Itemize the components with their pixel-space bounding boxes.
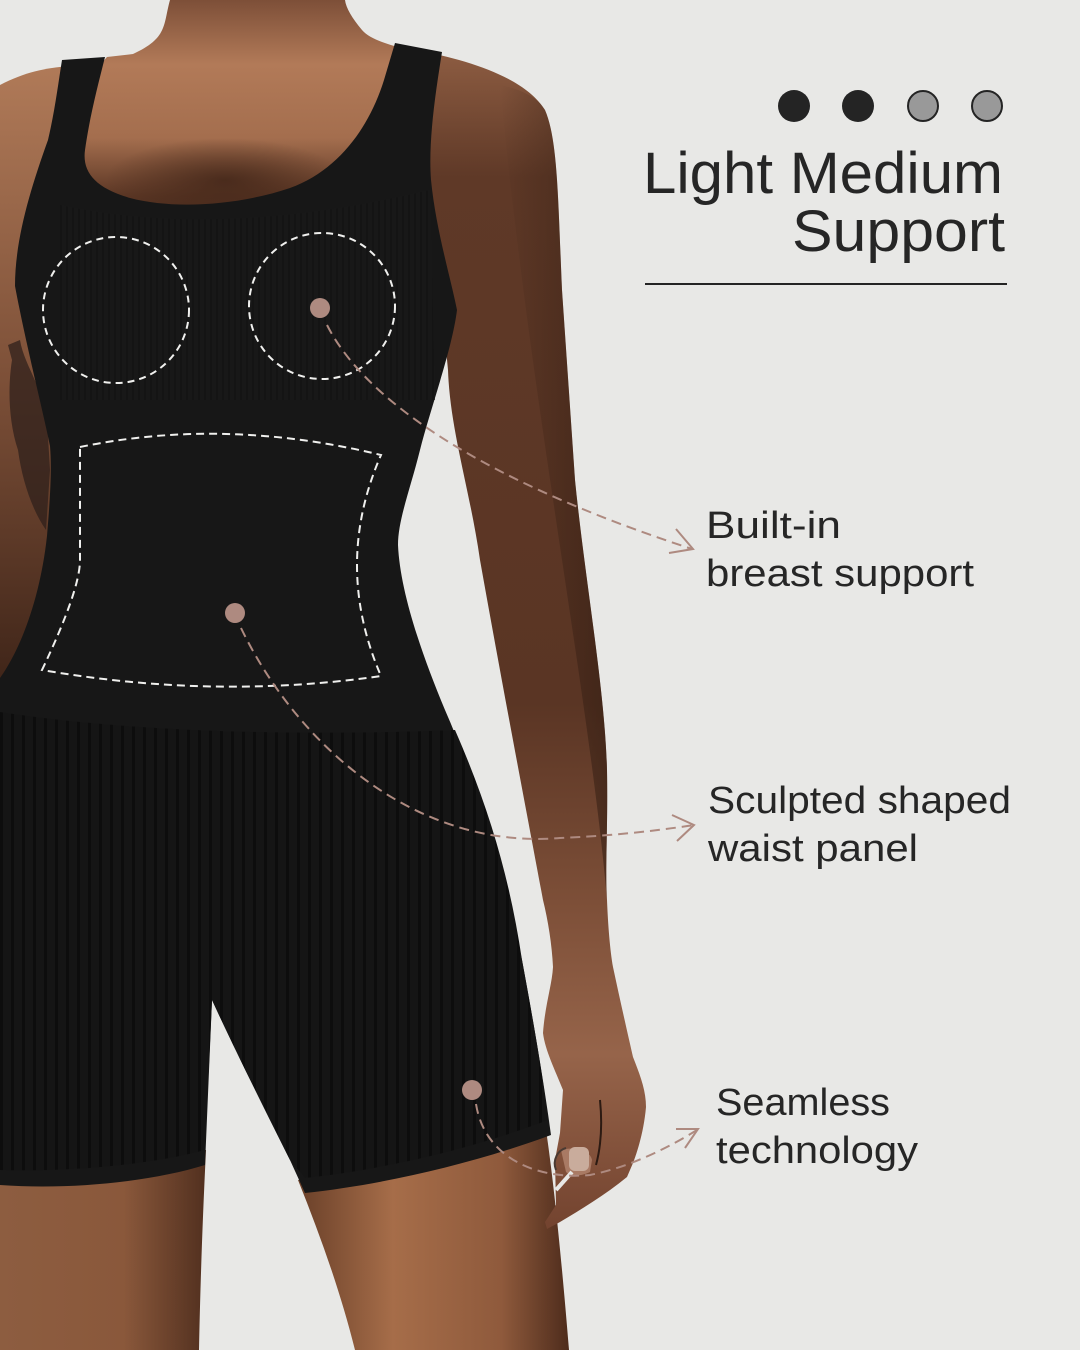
callout: breast support (310, 298, 974, 595)
black bodysuit (0, 43, 551, 1193)
arrow head (672, 815, 694, 841)
left arm and shoulder skin (0, 66, 70, 690)
arrow head (669, 529, 693, 553)
callout: waist panel (225, 603, 1011, 870)
title underline (645, 283, 1007, 285)
callout: seamless technology (462, 1080, 918, 1176)
title: Light Medium (643, 141, 1003, 206)
dashed arrow line (241, 628, 694, 839)
dashed arrow line (327, 325, 692, 549)
arm tattoo (8, 340, 50, 530)
dashed waist panel outline (42, 434, 381, 687)
right arm and hand skin (415, 50, 646, 1229)
left leg skin (0, 1150, 206, 1350)
label: breast support (706, 553, 974, 595)
label: Seamless (716, 1082, 890, 1124)
cleavage shadow (105, 138, 345, 222)
marker dot (310, 298, 330, 318)
label: technology (716, 1130, 918, 1172)
marker dot (225, 603, 245, 623)
dashed arrow line (476, 1104, 697, 1176)
fingers, nail and clip (555, 1100, 601, 1190)
shorts rib texture (0, 712, 548, 1178)
upper rib texture (60, 190, 435, 400)
title: Support (792, 199, 1005, 264)
dashed circle: right cup (249, 233, 395, 379)
right leg skin (298, 1130, 569, 1350)
neck and chest skin (70, 0, 440, 230)
marker dot (462, 1080, 482, 1100)
arrow head (676, 1129, 698, 1148)
dashed circle: left cup (43, 237, 189, 383)
support level rating dots (778, 90, 1002, 122)
label: Built-in (706, 505, 841, 547)
arm outer shading (500, 85, 607, 900)
model photo illustration (0, 0, 646, 1350)
label: Sculpted shaped (708, 780, 1011, 822)
label: waist panel (707, 828, 918, 870)
